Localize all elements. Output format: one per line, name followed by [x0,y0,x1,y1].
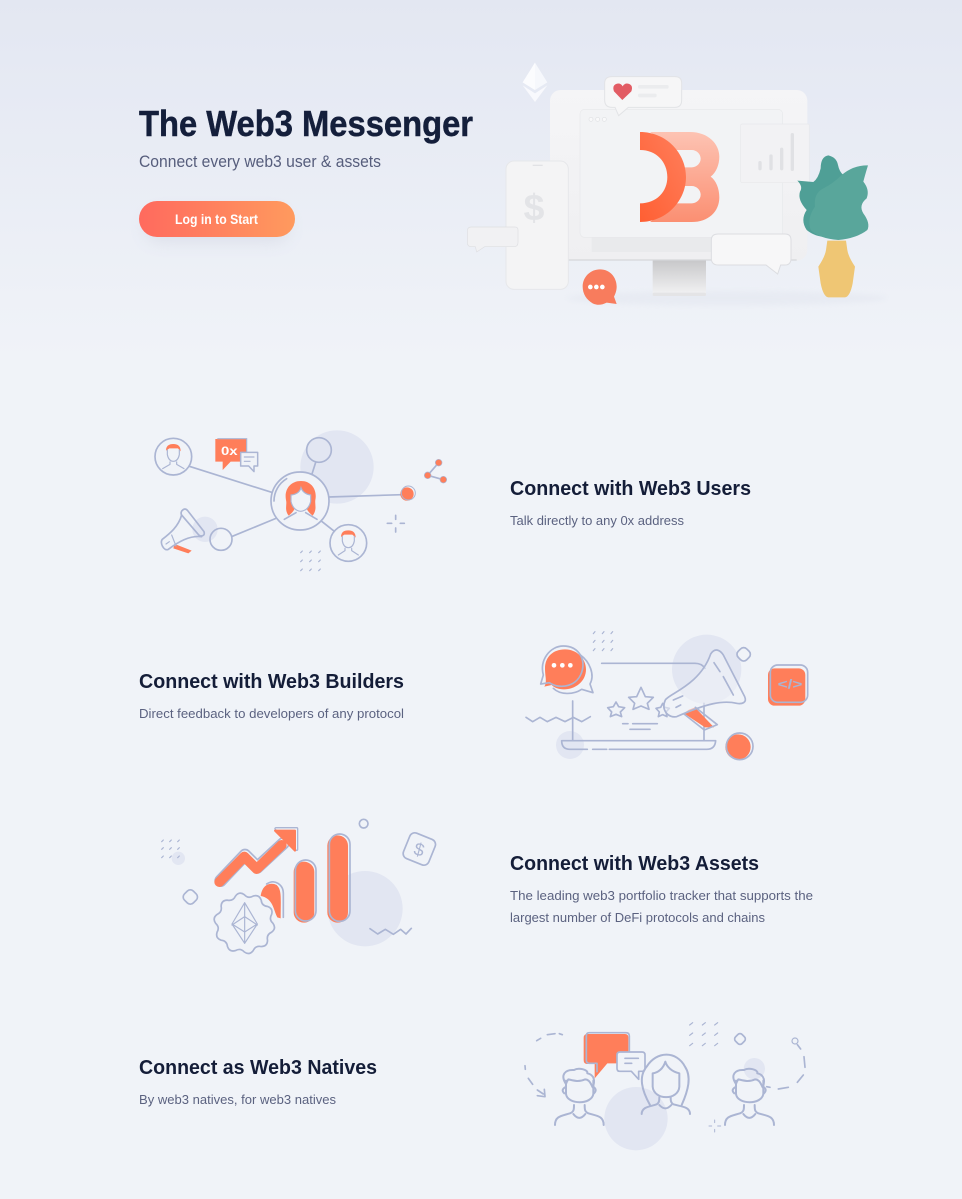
0x speech bubble: 0x [221,444,238,458]
description: web3 assets [510,888,813,925]
section: web3 natives illustration [525,1023,805,1150]
section: web3 assets illustration [162,819,437,954]
description: web3 assets: largest number of DeFi protocols and chains [510,910,765,925]
heart speech bubble [605,77,682,116]
laptop [562,663,716,749]
small left speech bubble [467,227,518,252]
phone: $ [524,186,545,228]
small speech bubble [617,1052,645,1079]
chat bubbles [541,646,593,693]
central avatar [271,472,329,530]
dot grid [690,1023,718,1046]
rounded diamond [181,888,199,906]
dot grid [593,632,613,651]
section: web3 users illustration [155,430,447,571]
megaphone [161,509,204,553]
description: web3 assets: The leading web3 portfolio tracker that supports the [510,888,813,903]
female person [642,1055,690,1114]
code icon: </> [778,678,802,692]
hero subtitle: Connect every web3 user & assets [139,153,381,171]
orange dot [725,733,753,760]
dollar tag: $ [412,839,427,861]
user avatar top-left [155,438,192,475]
zigzag line [526,717,590,722]
login button [139,201,295,242]
0x speech bubble [215,439,258,472]
chart card [741,124,809,183]
ethereum badge [214,893,275,954]
right speech bubble [711,234,791,274]
user avatar bottom-right [330,525,367,561]
dollar tag [402,831,437,867]
potted plant [797,155,868,297]
left person [555,1069,604,1125]
hero title: The Web3 Messenger [139,103,473,144]
heading: web3 users: Connect with Web3 Users [510,478,751,500]
description: web3 builders: Direct feedback to developers of any protocol [139,706,404,721]
code icon [768,665,808,706]
small circle [359,819,368,828]
heading: web3 assets: Connect with Web3 Assets [510,853,759,875]
description: web3 natives: By web3 natives, for web3 natives [139,1092,336,1107]
rounded diamond [733,1032,747,1046]
rounded diamond [735,646,752,663]
dashed path right [767,1038,805,1089]
connection lines [189,462,402,536]
dot grid [301,551,320,571]
hero illustration: 3D desktop, phone and plant [467,63,887,306]
right person [725,1069,774,1125]
rating stars [608,687,669,729]
empty node left [210,528,232,550]
orange chat bubble [583,269,617,305]
empty node top [307,438,331,462]
dot grid [162,840,179,858]
share icon [424,459,447,483]
orange node [400,486,415,501]
monitor [550,90,807,296]
dashed arrow left [525,1034,562,1097]
heading: web3 natives: Connect as Web3 Natives [139,1057,377,1079]
zigzag line [370,928,411,934]
crosshair sparkle [709,1120,721,1132]
section: web3 builders illustration [526,632,808,760]
megaphone [664,650,745,730]
rising arrow [219,829,297,882]
login button: Log in to Start [175,212,258,227]
orange speech bubble [584,1033,629,1078]
phone [506,161,568,289]
description: web3 users: Talk directly to any 0x address [510,513,684,528]
logo [640,132,719,222]
icon: ethereum diamond [523,63,547,102]
heading: web3 builders: Connect with Web3 Builders [139,671,404,693]
crosshair sparkle [387,515,404,532]
bar chart [261,834,350,923]
